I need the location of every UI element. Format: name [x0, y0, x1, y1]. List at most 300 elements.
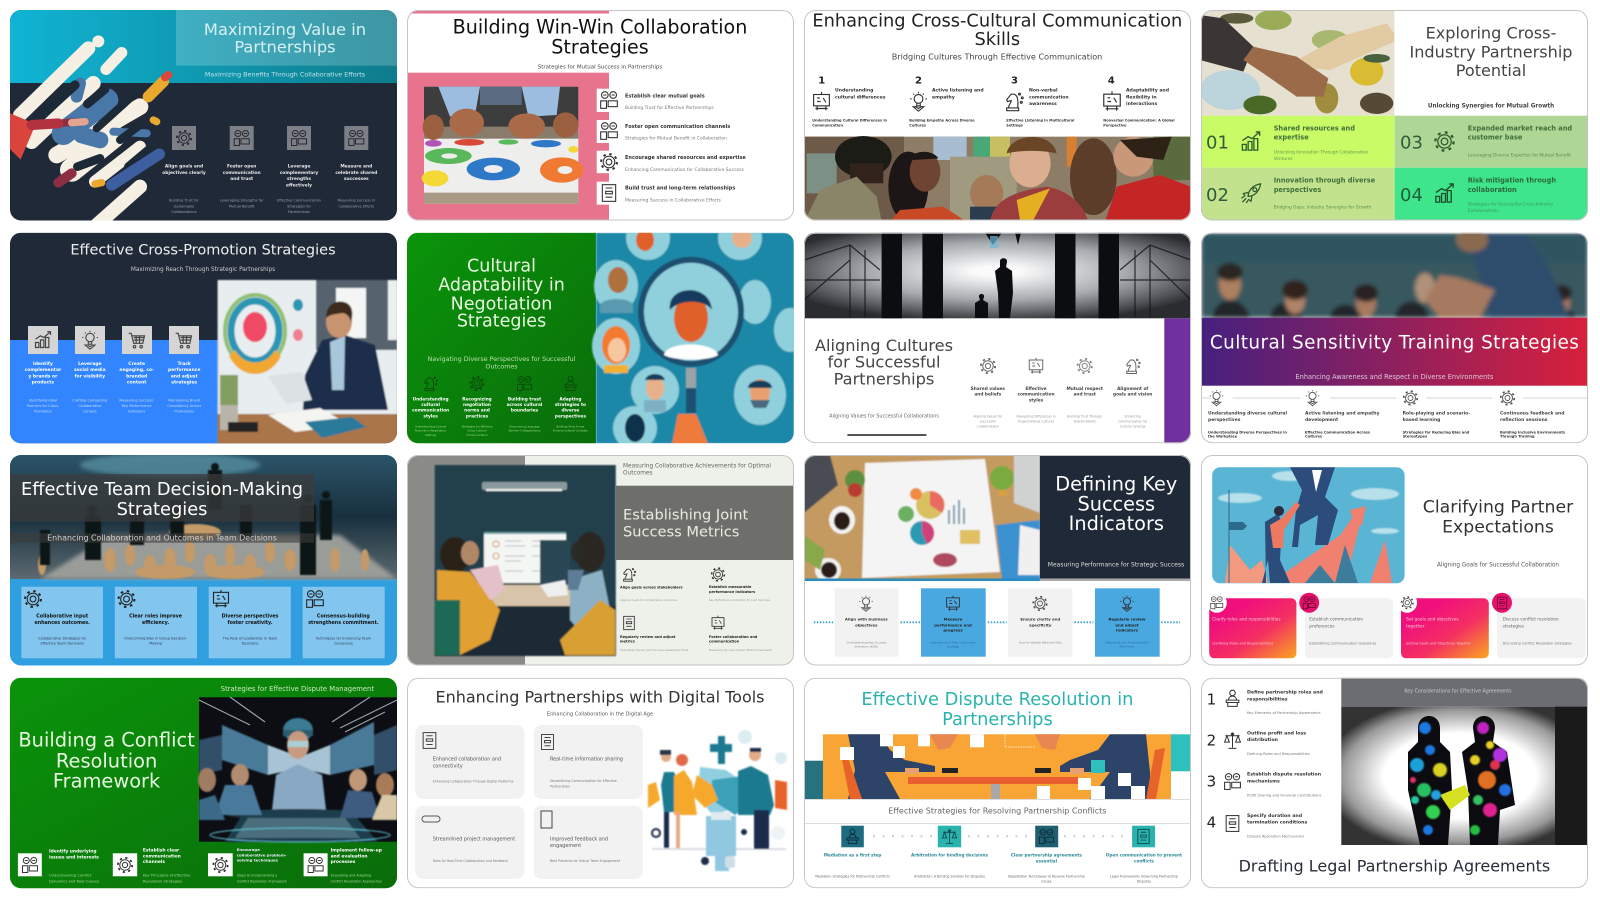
- card 2: [1299, 593, 1393, 658]
- photo: man with tablet: [218, 280, 398, 444]
- cell title: perspectives: [1274, 186, 1321, 194]
- item title: Active listening and: [932, 88, 984, 94]
- cell subtitle: Ventures: [1274, 156, 1293, 162]
- heading: Effective Dispute Resolution in: [861, 689, 1133, 710]
- item: trust: [597, 182, 735, 205]
- heading: Exploring Cross-: [1426, 23, 1557, 42]
- item title: y brands or: [28, 373, 58, 379]
- item subtitle: Enhancing: [1125, 415, 1141, 419]
- photo: desk with charts: [804, 455, 1040, 582]
- cell 04: 04: [1400, 185, 1423, 206]
- item title: Establish clear mutual goals: [625, 93, 705, 99]
- card title: foster creativity.: [227, 620, 273, 626]
- card subtitle: Tools for Real-Time Collaboration and Feedback: [432, 859, 508, 863]
- item: Align goals: [162, 126, 206, 214]
- item subtitle: Building Trust for: [169, 199, 199, 203]
- slide: Effective Team Decision-Making Strategies: [10, 453, 397, 666]
- photo: meeting room: [435, 465, 616, 656]
- item subtitle: Promotion: [34, 409, 52, 413]
- item title: termination conditions: [1247, 820, 1307, 826]
- item subtitle: Key Principles of Effective: [143, 873, 191, 877]
- item subtitle: Measuring Success in Collaborative Efforts: [625, 197, 721, 203]
- item subtitle: Aligning Goals for Collaborative Outcomes: [620, 598, 678, 602]
- item title: Adaptability and: [1126, 88, 1169, 94]
- card title: strategies: [1503, 623, 1525, 629]
- item subtitle: Building Trust Through: [1067, 415, 1102, 419]
- item title: content: [127, 379, 147, 385]
- item subtitle: Shared Beliefs: [1074, 420, 1096, 424]
- header text: Key Considerations for Effective Agreements: [1404, 688, 1512, 694]
- item subtitle: Settings: [1006, 124, 1023, 128]
- item title: Encourage shared resources and expertise: [625, 155, 746, 161]
- item subtitle: Communication: [812, 124, 843, 128]
- item subtitle: Measuring Success in: [337, 199, 375, 203]
- item subtitle: Organizational Cultures: [1018, 420, 1055, 424]
- item title: Shared values: [971, 386, 1005, 392]
- heading: Defining Key: [1055, 473, 1177, 496]
- item title: communication: [1017, 392, 1055, 398]
- item subtitle: Negotiation Techniques to Resolve Partnership: [1008, 874, 1085, 878]
- item title: Understanding: [835, 88, 873, 94]
- item subtitle: Nuances in Negotiation: [415, 429, 447, 433]
- card 4: [1492, 593, 1586, 658]
- heading: Resolution: [56, 749, 157, 772]
- item title: strengths: [287, 176, 311, 182]
- card subtitle: Techniques for Enhancing Team: [315, 636, 372, 640]
- card title: enhances outcomes.: [34, 620, 90, 626]
- heading: Framework: [53, 769, 161, 792]
- top text: Measuring Collaborative Achievements for Optimal: [623, 464, 771, 470]
- item title: strategies to: [555, 402, 586, 408]
- item: Foster communication: [220, 126, 264, 208]
- cell subtitle: Strategies for Successful Cross-Industry: [1468, 201, 1554, 207]
- item title: styles: [1029, 398, 1044, 404]
- card subtitle: Clarifying Roles and Responsibilities: [1212, 642, 1273, 646]
- item title: Clear partnership agreements: [1011, 852, 1082, 857]
- item title: Encourage: [237, 847, 260, 852]
- item title: objectives clearly: [162, 170, 206, 176]
- card title: Align with business: [845, 617, 888, 622]
- cell title: expertise: [1274, 134, 1309, 142]
- heading: Adaptability in: [438, 276, 565, 296]
- item subtitle: Leveraging Strengths for: [220, 199, 264, 203]
- item title: flexibility in: [1126, 94, 1157, 100]
- item 1: [1208, 390, 1287, 439]
- item subtitle: Collaborations: [977, 425, 999, 429]
- item 2: [462, 377, 493, 437]
- item title: Build trust and long-term relationships: [625, 185, 735, 191]
- item title: Establish measurable: [709, 585, 752, 589]
- cell title: Expanded market reach and: [1468, 125, 1572, 133]
- item title: Leverage: [78, 361, 102, 367]
- illustration: magnifier and faces: [592, 216, 806, 450]
- item title: Understanding: [413, 397, 449, 403]
- photo: hands over gears: [422, 87, 583, 204]
- card subtitle: Effective Team Decisions: [40, 642, 84, 646]
- item subtitle: Aligning Values for: [973, 415, 1003, 419]
- card subtitle: Partnerships: [550, 784, 570, 788]
- card 1: [1207, 593, 1296, 658]
- cell 03: 03: [1400, 132, 1423, 153]
- heading: Indicators: [1069, 512, 1164, 535]
- slide: Cultural Sensitivity Training Strategies: [1201, 228, 1588, 444]
- photo: blurred group and pointing man: [1201, 228, 1588, 318]
- item title: perspectives: [1208, 417, 1241, 423]
- subtitle: Navigating Diverse Perspectives for Successful: [428, 356, 576, 363]
- card 3: [1397, 593, 1489, 658]
- cell subtitle: Bridging Gaps: Industry Synergies for Growth: [1274, 205, 1371, 211]
- item title: boundaries: [511, 407, 539, 413]
- item title: Outline profit and loss: [1247, 730, 1306, 736]
- item subtitle: Legal Frameworks Governing Partnership: [1110, 874, 1178, 878]
- item title: Role-playing and scenario-: [1403, 411, 1470, 417]
- item subtitle: Cross-Cultural: [468, 429, 487, 433]
- card subtitle: Consensus: [334, 642, 353, 646]
- item title: norms and: [464, 407, 490, 413]
- cell title: Shared resources and: [1274, 125, 1355, 133]
- panel: pink top bar: [407, 10, 609, 14]
- slide: Clarifying Partner Expectations: [1201, 455, 1588, 666]
- photo: handshake over map: [1200, 10, 1394, 116]
- item subtitle: Barriers in Negotiations: [509, 429, 541, 433]
- item 2: [1016, 358, 1056, 424]
- subtitle: Maximizing Benefits Through Collaborative Efforts: [205, 71, 366, 79]
- card title: Streamlined project management: [433, 836, 515, 842]
- item title: performance: [168, 367, 200, 373]
- photo: futuristic control table: [198, 697, 397, 842]
- item 4: [1207, 813, 1307, 838]
- item title: Understanding diverse cultural: [1208, 411, 1287, 417]
- item title: products: [32, 379, 54, 385]
- item subtitle: Communication: [466, 433, 488, 437]
- panel: purple bar: [1164, 318, 1191, 443]
- item title: celebrate shared: [335, 170, 377, 176]
- panel: teal header band: [10, 10, 397, 83]
- item subtitle: Sustainable: [174, 204, 194, 208]
- item title: and beliefs: [974, 392, 1002, 398]
- item subtitle: Defining Roles and Responsibilities: [1247, 752, 1310, 756]
- card subtitle: Collaborative Strategies for: [38, 636, 87, 640]
- top text: Outcomes: [623, 470, 652, 476]
- item 2: [72, 326, 107, 413]
- item subtitle: Successful: [980, 420, 996, 424]
- item subtitle: Effective Communication: [277, 199, 321, 203]
- panel: pink block: [407, 73, 609, 221]
- item subtitle: Dynamics and Root Causes: [49, 879, 99, 883]
- card title: Set goals and objectives: [1406, 617, 1459, 623]
- item title: distribution: [1247, 737, 1278, 743]
- item 4: [304, 848, 382, 883]
- heading: Aligning Cultures: [815, 336, 953, 355]
- card subtitle: Importance of KSIs in Business: [931, 640, 976, 644]
- item title: Regularly review and adjust: [620, 635, 676, 639]
- item subtitle: Strategies for Mutual Benefit in Collaboration: [625, 136, 727, 142]
- item 4: [553, 376, 588, 433]
- item subtitle: Dispute Resolution Mechanisms: [1247, 834, 1304, 838]
- cell 04: [1395, 168, 1588, 221]
- heading: Skills: [974, 29, 1020, 50]
- item 2: [113, 848, 191, 883]
- item 3: 3: [1207, 772, 1216, 790]
- item title: and trust: [230, 176, 253, 182]
- item title: Identify underlying: [49, 848, 96, 854]
- item subtitle: Cultural Synergy: [1120, 425, 1146, 429]
- heading: Maximizing Value in: [204, 20, 366, 39]
- item 3: [1403, 391, 1470, 439]
- item title: Open communication to prevent: [1106, 852, 1182, 857]
- panel: gray title block: [616, 486, 794, 560]
- panel: blue block: [10, 340, 218, 444]
- item subtitle: Understanding Cultural: [415, 425, 446, 429]
- item title: processes: [331, 859, 356, 865]
- item: Leverage strengths: [277, 126, 321, 214]
- item title: engaging, co-: [119, 367, 154, 373]
- item subtitle: Navigating Differences in: [1016, 415, 1056, 419]
- item title: Implement follow-up: [331, 848, 382, 854]
- cell title: Risk mitigation through: [1468, 177, 1556, 185]
- item subtitle: Cultures: [909, 124, 926, 128]
- slide: Aligning Cultures for Successful Partnerships: [804, 233, 1191, 444]
- heading: Enhancing Partnerships with Digital Tools: [435, 687, 765, 706]
- item 2: [1305, 390, 1379, 439]
- card subtitle: Overcoming Bias in Group Decision-: [124, 636, 188, 640]
- item title: Establish clear: [143, 848, 180, 854]
- subtitle: Enhancing Awareness and Respect in Diverse Environments: [1295, 373, 1494, 381]
- card title: Establish communication: [1309, 617, 1363, 623]
- card 4: [1095, 588, 1160, 657]
- heading: Effective Cross-Promotion Strategies: [70, 242, 336, 258]
- item title: branded: [126, 373, 147, 379]
- cell subtitle: Collaborations: [1468, 208, 1499, 214]
- item subtitle: Understanding Cultural Differences in: [812, 119, 888, 123]
- item title: communication: [1029, 94, 1069, 100]
- item title: successes: [344, 177, 369, 182]
- item title: Establish dispute resolution: [1247, 772, 1321, 778]
- item subtitle: Effective Listening in Multicultural: [1006, 119, 1074, 123]
- heading: Success Metrics: [623, 524, 739, 541]
- subtitle: Enhancing Collaboration and Outcomes in Team Decisions: [47, 534, 277, 543]
- item 3: [1066, 359, 1103, 424]
- item 2: 2: [915, 75, 922, 86]
- item subtitle: Cultures: [1305, 435, 1322, 439]
- item subtitle: Nonverbal Communication: A Global: [1103, 119, 1175, 123]
- heading: Establishing Joint: [623, 506, 748, 523]
- item 4: 4: [1207, 814, 1216, 832]
- item subtitle: Building Empathy Across Diverse: [909, 119, 975, 123]
- slide: Enhancing Partnerships with Digital Tools: [407, 678, 794, 889]
- item 1: [25, 326, 62, 413]
- item title: communication: [223, 170, 261, 176]
- heading: Expectations: [1442, 517, 1554, 537]
- item 4: [167, 326, 201, 413]
- slide: Cultural Adaptability in Negotiation Strategies: [407, 216, 806, 450]
- item: open channels: [597, 120, 730, 143]
- card 1: [21, 587, 103, 658]
- card subtitle: Understanding Key Success: [846, 640, 887, 644]
- item 3: 3: [1011, 75, 1018, 86]
- item subtitle: Settings: [425, 433, 437, 437]
- item subtitle: Resolution Strategies: [143, 879, 182, 883]
- card title: Ensure clarity and: [1020, 617, 1060, 622]
- item title: development: [1305, 417, 1339, 423]
- item subtitle: Mutual Benefit: [229, 204, 255, 208]
- card 3: [209, 587, 291, 658]
- item title: styles: [423, 413, 438, 419]
- card subtitle: Setting Goals and Objectives Together: [1406, 642, 1472, 646]
- item title: performance indicators: [709, 590, 755, 594]
- panel: title overlay: [10, 474, 314, 522]
- subtitle: Bridging Cultures Through Effective Communication: [892, 51, 1102, 61]
- item subtitle: Conflict Resolution Framework: [237, 879, 287, 883]
- item title: social media: [74, 367, 106, 373]
- item 2: [909, 75, 984, 128]
- item subtitle: Collaborative: [78, 404, 101, 408]
- card title: specificity: [1029, 622, 1052, 627]
- item subtitle: Steps to Implementing a: [237, 873, 277, 877]
- item title: Building trust: [508, 397, 541, 403]
- heading: Potential: [1456, 61, 1526, 80]
- item title: conflicts: [1134, 858, 1154, 863]
- item title: diverse: [561, 407, 579, 413]
- item title: goals and vision: [1113, 392, 1152, 398]
- item subtitle: the Workplace: [1208, 435, 1238, 439]
- heading: Strategies: [457, 312, 546, 332]
- heading: Negotiation: [451, 294, 552, 314]
- slide: Enhancing Cross-Cultural Communication Skills: [804, 10, 1191, 222]
- item title: Identify: [33, 361, 53, 367]
- item 1: [620, 568, 683, 602]
- card subtitle: Discussing Conflict Resolution Strategies: [1503, 642, 1572, 646]
- item 1: [815, 826, 890, 878]
- card subtitle: Best Practices for Virtual Team Engagement: [550, 859, 621, 863]
- item: shared resources: [597, 151, 746, 173]
- item title: communication: [709, 640, 740, 644]
- item 1: 1: [1207, 690, 1216, 708]
- card subtitle: How to Identify Relevant KSIs: [1019, 640, 1062, 644]
- subtitle: Aligning Values for Successful Collaborations: [829, 413, 939, 419]
- item title: Arbitration for binding decisions: [911, 852, 988, 857]
- item title: reflection sessions: [1500, 417, 1548, 423]
- card title: efficiency.: [142, 620, 169, 626]
- card title: performance and: [934, 622, 972, 627]
- item 3: [1006, 75, 1074, 128]
- card 1: [835, 588, 898, 657]
- slide: Building a Conflict Resolution Framework: [10, 678, 397, 889]
- item subtitle: Evaluating Impact: Joint Success Assessment Tools: [620, 648, 689, 652]
- card 3: [1008, 588, 1072, 657]
- item title: based learning: [1403, 417, 1440, 423]
- cell 03: [1395, 116, 1588, 168]
- item title: perspectives: [555, 413, 586, 419]
- heading: Cultural: [467, 257, 536, 277]
- item subtitle: Mediation Strategies for Partnership Conflicts: [815, 874, 890, 878]
- item subtitle: Key Performance Indicators for Joint Ventures: [709, 598, 771, 602]
- item subtitle: Perspective: [1103, 124, 1127, 128]
- card subtitle: Enhancing Collaboration Through Digital Platforms: [433, 779, 514, 783]
- panel: dark title block: [1040, 455, 1191, 580]
- card 4: [534, 806, 643, 879]
- item subtitle: Partnerships: [288, 210, 310, 214]
- item 3: [119, 326, 154, 413]
- cell subtitle: Unlocking Innovation Through Collaborative: [1274, 149, 1368, 155]
- heading: Partnerships: [234, 38, 336, 56]
- item subtitle: Partners for Cross-: [27, 404, 60, 408]
- subtitle: Aligning Goals for Successful Collaboration: [1437, 563, 1559, 569]
- heading: Strategies: [551, 36, 649, 58]
- card title: strengthens commitment.: [308, 620, 379, 626]
- item: Measure successes: [335, 126, 377, 208]
- cell 01: 01: [1206, 132, 1229, 153]
- item title: mechanisms: [1247, 778, 1280, 784]
- heading: Success: [1077, 493, 1155, 516]
- cell 02: 02: [1206, 185, 1229, 206]
- card 2: [115, 587, 197, 658]
- slide: Effective Cross-Promotion Strategies: [10, 233, 398, 444]
- subtitle: Measuring Performance for Strategic Success: [1048, 561, 1184, 568]
- heading: Strategies: [117, 499, 207, 520]
- heading: Partnerships: [834, 369, 934, 388]
- item 4: [1113, 359, 1152, 429]
- card subtitle: Streamlining Communication for Effective: [550, 779, 617, 783]
- item subtitle: Strategies for: [287, 204, 311, 208]
- item 4: 4: [1108, 75, 1115, 86]
- card title: Regularly review: [1109, 617, 1146, 622]
- item title: collaborative problem-: [237, 852, 287, 857]
- item subtitle: Profit Sharing and Financial Contributions: [1247, 793, 1322, 797]
- item subtitle: Building Inclusive Environments: [1500, 430, 1565, 434]
- item subtitle: Overcoming Language: [509, 425, 540, 429]
- item title: Effective: [1025, 386, 1047, 392]
- card subtitle: Establishing Communication Guidelines: [1309, 642, 1377, 646]
- card title: and adjust: [1115, 622, 1139, 627]
- card subtitle: The Role of Leadership in Team: [222, 636, 278, 640]
- item 1: 1: [818, 75, 825, 86]
- item title: Create: [128, 361, 145, 367]
- heading: Enhancing Cross-Cultural Communication: [812, 11, 1182, 32]
- card title: objectives: [855, 622, 878, 627]
- item title: Recognizing: [462, 397, 492, 403]
- panel: grey header: [1341, 678, 1588, 707]
- card title: Real-time information sharing: [550, 757, 623, 763]
- item title: and trust: [1074, 392, 1096, 398]
- item subtitle: Strategies for Effective: [462, 425, 493, 429]
- card title: Consensus-building: [317, 614, 370, 620]
- item 3: [507, 376, 543, 433]
- card subtitle: Making: [149, 642, 162, 646]
- item 1: [1207, 689, 1323, 715]
- card title: Clear roles improve: [129, 614, 183, 620]
- item title: Alignment of: [1117, 386, 1148, 392]
- item subtitle: Through Training: [1500, 435, 1535, 439]
- panel: gradient title band: [1201, 318, 1588, 386]
- slide: Effective Dispute Resolution in Partnerships: [804, 678, 1191, 889]
- item title: and evaluation: [331, 853, 368, 859]
- card 2: [921, 588, 986, 657]
- item title: channels: [143, 859, 165, 865]
- item title: complementar: [25, 367, 62, 373]
- item 1: [412, 377, 449, 437]
- item title: for visibility: [75, 373, 105, 379]
- heading: Industry Partnership: [1409, 42, 1573, 61]
- slide: Maximizing Value in Partnerships: [10, 10, 397, 233]
- item 2: [709, 568, 771, 602]
- item 1: [812, 75, 888, 128]
- heading: Partnerships: [942, 709, 1053, 730]
- card 4: [303, 587, 385, 658]
- item subtitle: Collaborative Efforts: [338, 204, 374, 208]
- cell title: customer base: [1468, 134, 1523, 142]
- item title: issues and interests: [49, 854, 99, 860]
